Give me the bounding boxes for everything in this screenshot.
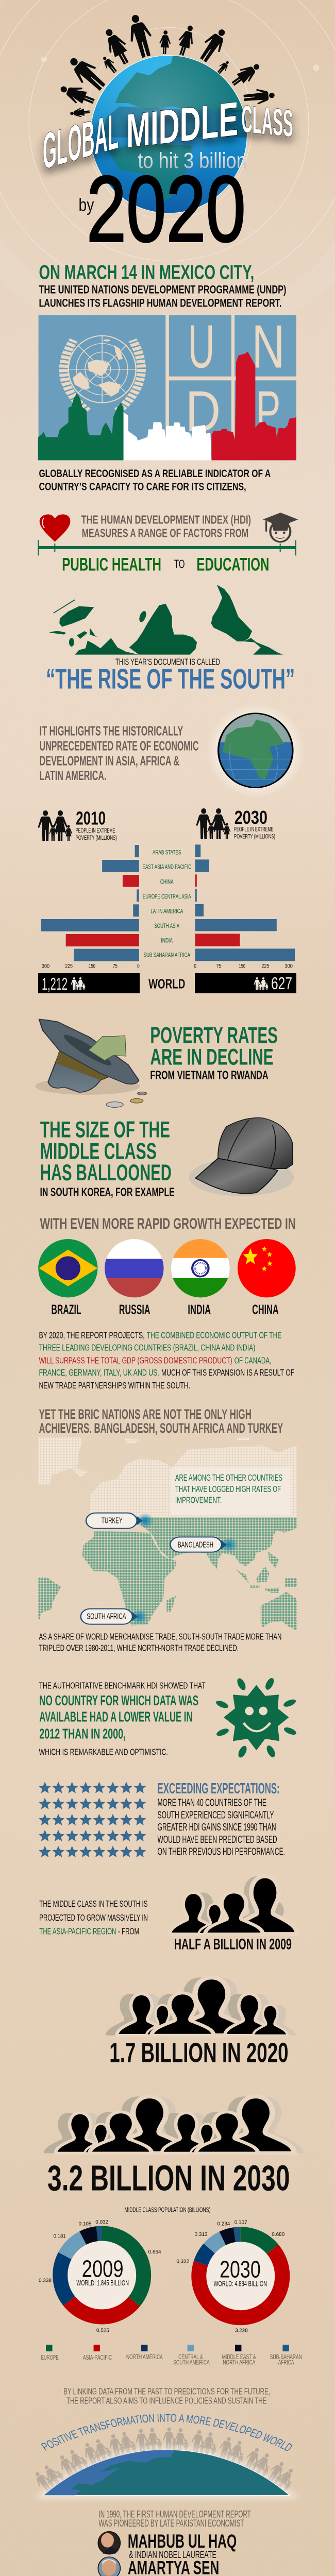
UN letters: U [188,313,215,381]
donut labels: 0.107 [234,2220,247,2225]
text: by 2020 projections: NEW TRADE PARTNERSHIPS WITHIN THE SOUTH. [39,1381,190,1391]
label: 2030: PEOPLE IN EXTREME [234,826,274,833]
panel: benchmark HDI [39,1632,298,1758]
text: first report [99,2509,251,2529]
text: exceeding expectations [158,1780,285,1857]
legend: NORTH AMERICA [126,2353,163,2361]
bars 2010 [41,845,139,961]
label: 2010: POVERTY (MILLIONS) [76,834,117,841]
country names: BRAZIL [51,1302,81,1317]
globe dome [32,2447,290,2497]
portrait: Amartya Sen [98,2557,120,2576]
Mexico City skyline in flag colours [38,352,296,460]
UN letters [186,313,285,444]
text: authoritative benchmark: THE AUTHORITATIVE BENCHMARK HDI SHOWED THAT [39,1681,206,1691]
chart title: MIDDLE CLASS POPULATION (BILLIONS) [125,2206,210,2214]
region labels [142,849,191,958]
donut chart: 2009 [60,2233,144,2317]
donut labels: 0.032 [95,2219,108,2225]
silhouettes: 1.7 billion [106,1977,296,2036]
subtitle: to hit 3 billion by 2020 [79,149,247,261]
donut labels: 0.105 [79,2221,91,2227]
panel: extreme poverty chart [38,807,295,992]
legend: SOUTH AMERICA [173,2359,210,2366]
axis labels: 75 [113,962,118,969]
flag: China [235,1238,299,1298]
panel: UNDP launch [38,261,296,493]
text: highlights: IT HIGHLIGHTS THE HISTORICALLY [40,724,183,739]
legend: CENTRAL & [178,2353,203,2361]
text: middle class in the south: THE ASIA-PACIFIC REGION [39,1927,116,1937]
people around the dome [31,2427,299,2495]
callout: South Africa [81,1609,148,1624]
donut labels: WORLD: 4.884 BILLION [214,2279,267,2288]
legend: NORTH AFRICA [223,2359,255,2366]
region labels: LATIN AMERICA [150,908,183,914]
people silhouettes on the globe [58,12,275,118]
donut labels: 0.322 [176,2259,189,2264]
legend [41,2345,302,2366]
callout: South Africa: SOUTH AFRICA [87,1612,126,1621]
heading: size of the middle class: IN SOUTH KOREA, FOR EXAMPLE [40,1185,175,1199]
donut labels: 0.313 [195,2232,208,2238]
text box: other countries: IMPROVEMENT. [175,1495,222,1505]
label: world: WORLD [148,976,185,992]
legend: MIDDLE EAST & [222,2353,256,2361]
region labels: ARAB STATES [153,849,181,856]
panel: 3.2 billion and donut charts [39,2096,304,2333]
text: other achievers [39,1407,283,1436]
text: highlights: LATIN AMERICA. [40,769,106,783]
donut labels: WORLD: 1.845 BILLION [76,2279,129,2287]
icon: family 2010 [38,810,72,841]
text: authoritative benchmark [39,1681,206,1757]
intro text [39,284,286,310]
text: authoritative benchmark: 2012 THAN IN 2000, [39,1725,126,1742]
axis labels: 300 [285,962,293,969]
label: 2010 [76,808,117,841]
text: middle class in the south: PROJECTED TO GROW MASSIVELY IN [39,1913,148,1923]
axis labels: 300 [42,962,49,969]
axis labels: 150 [89,962,95,969]
legend: AFRICA [278,2359,294,2366]
panel: world total 2010: 1,212 [42,974,68,993]
region labels: SUB SAHARAN AFRICA [144,952,190,958]
heading: size of the middle class [40,1116,175,1199]
star grid [39,1782,146,1857]
axis labels: 0 [137,962,140,969]
flag: Russia [105,1239,164,1297]
text: linking data [63,2387,270,2406]
panel: hero [0,0,335,297]
text: by 2020 projections [39,1331,294,1391]
heading: size of the middle class: HAS BALLOONED [40,1160,172,1185]
text: HDI [81,513,251,540]
heading: poverty rates [150,1022,278,1082]
callout: Turkey: TURKEY [102,1516,123,1525]
curved heading: POSITIVE TRANSFORMATION INTO A MORE DEVELOPED WORLD [41,2414,292,2451]
axis labels: 0 [194,962,196,969]
region labels: INDIA [161,937,173,944]
callout: Turkey [86,1513,154,1529]
text: reliable indicator [39,467,271,493]
legend: EUROPE [41,2353,59,2362]
panel: world total 2030: 627 [271,974,292,993]
subtitle: to hit 3 billion by 2020: by [79,195,94,215]
axis labels: 225 [65,962,73,969]
heading: size of the middle class: MIDDLE CLASS [40,1138,157,1164]
text: trade share [39,1632,281,1653]
label: 2030: POVERTY (MILLIONS) [234,833,275,840]
subtitle: to hit 3 billion by 2020: to hit 3 billion [138,149,247,173]
UN letters: N [252,313,285,381]
donut labels [39,2219,284,2333]
axis labels [42,962,293,969]
donut labels: 0.181 [54,2233,66,2239]
legend: SUB-SAHARAN [270,2353,302,2361]
donut labels: 0.338 [39,2278,52,2283]
country names: RUSSIA [119,1302,150,1317]
UNDP illustration [38,313,296,460]
region labels: SOUTH ASIA [154,922,179,929]
callout: Bangladesh [170,1537,238,1552]
country names: CHINA [252,1302,279,1317]
region labels: CHINA [160,878,174,885]
flag: Brazil [36,1238,100,1298]
icon: poor hat with money [35,1019,147,1107]
icon: family 2030 [196,808,230,839]
region labels: EAST ASIA AND PACIFIC [142,863,191,870]
country names: INDIA [188,1302,211,1317]
text: middle class in the south: - FROM [118,1927,139,1937]
name: Mahbub ul Haq: MAHBUB UL HAQ [128,2531,237,2552]
bars 2030 [195,844,295,961]
donut labels: 0.664 [148,2249,161,2255]
panel: exceeding expectations [39,1780,297,2068]
panel: world total 2030 [195,973,296,993]
donut labels: 3.228 [235,2328,248,2333]
icon: smiling sun [214,1677,298,1758]
text: highlights [40,724,199,783]
text: public health to education: EDUCATION [196,554,269,574]
text: by 2020 projections: BY 2020, THE REPORT PROJECTS, [39,1331,145,1341]
country names [51,1302,279,1317]
icon: baseball cap [189,1118,294,1196]
title: Global Middle Class: GLOBAL [43,102,119,180]
dotted world map [39,1437,297,1631]
portrait: Mahbub ul Haq [98,2532,120,2554]
icon: heart [40,514,70,542]
panel: world total 2010 [38,973,140,993]
donut chart: 2030 [199,2234,282,2318]
label: 2030: 2030 [234,807,267,828]
silhouettes: half a billion [170,1876,297,1934]
text box: other countries [171,1467,291,1515]
text: authoritative benchmark: WHICH IS REMARKABLE AND OPTIMISTIC. [39,1748,168,1757]
text: highlights: DEVELOPMENT IN ASIA, AFRICA & [40,754,179,769]
legend: ASIA-PACIFIC [83,2353,112,2362]
panel: BRIC flags [36,1238,299,1436]
icon: graduation cap [263,513,298,542]
panel: HDI and rise of the south [38,513,305,799]
panel: poverty and middle class [35,1019,296,1232]
donut labels: 2030 [220,2256,261,2283]
icon: globe [210,706,300,794]
text: middle class in the south: THE MIDDLE CLASS IN THE SOUTH IS [39,1899,147,1909]
text: document is called: THIS YEAR’S DOCUMENT IS CALLED [115,657,220,667]
label: 2030 [234,807,275,840]
silhouettes: 3.2 billion [44,2096,304,2153]
text: by 2020 projections: OF CANADA, [234,1356,271,1366]
text: middle class in the south [39,1899,148,1937]
callout: Bangladesh: BANGLADESH [178,1540,213,1549]
axis labels: 150 [239,962,245,969]
donut labels: 2009 [82,2256,124,2282]
label: 2010: 2010 [76,808,106,829]
text: public health to education: TO [174,557,185,571]
axis labels: 225 [261,962,269,969]
donut labels: 0.680 [272,2232,284,2238]
title: Global Middle Class [43,92,293,180]
flag: India [171,1239,230,1297]
panel: legend and transformation [35,2345,302,2501]
upside down world map [49,585,283,655]
region labels: EUROPE CENTRAL ASIA [143,893,191,900]
icon: UN emblem [63,336,141,411]
map: northern dots [39,1437,297,1517]
donut labels: 0.525 [96,2328,109,2333]
panel: founders [98,2509,251,2576]
text: Indian Nobel laureate: & INDIAN NOBEL LAUREATE [129,2549,216,2560]
text: public health to education: PUBLIC HEALTH [62,554,161,574]
globe [90,55,247,213]
background rings [0,0,335,338]
text: by 2020 projections: FRANCE, GERMANY, ITALY, UK AND US. [39,1368,159,1378]
UN letters: P [256,379,280,444]
timeline bar [38,540,296,555]
label: 2010: PEOPLE IN EXTREME [76,827,115,834]
donut labels: 0.234 [217,2221,230,2227]
axis labels: 75 [216,962,221,969]
UN letters: D [186,379,221,444]
map: southern dots [39,1517,297,1631]
heading: size of the middle class: THE SIZE OF THE [40,1116,170,1142]
